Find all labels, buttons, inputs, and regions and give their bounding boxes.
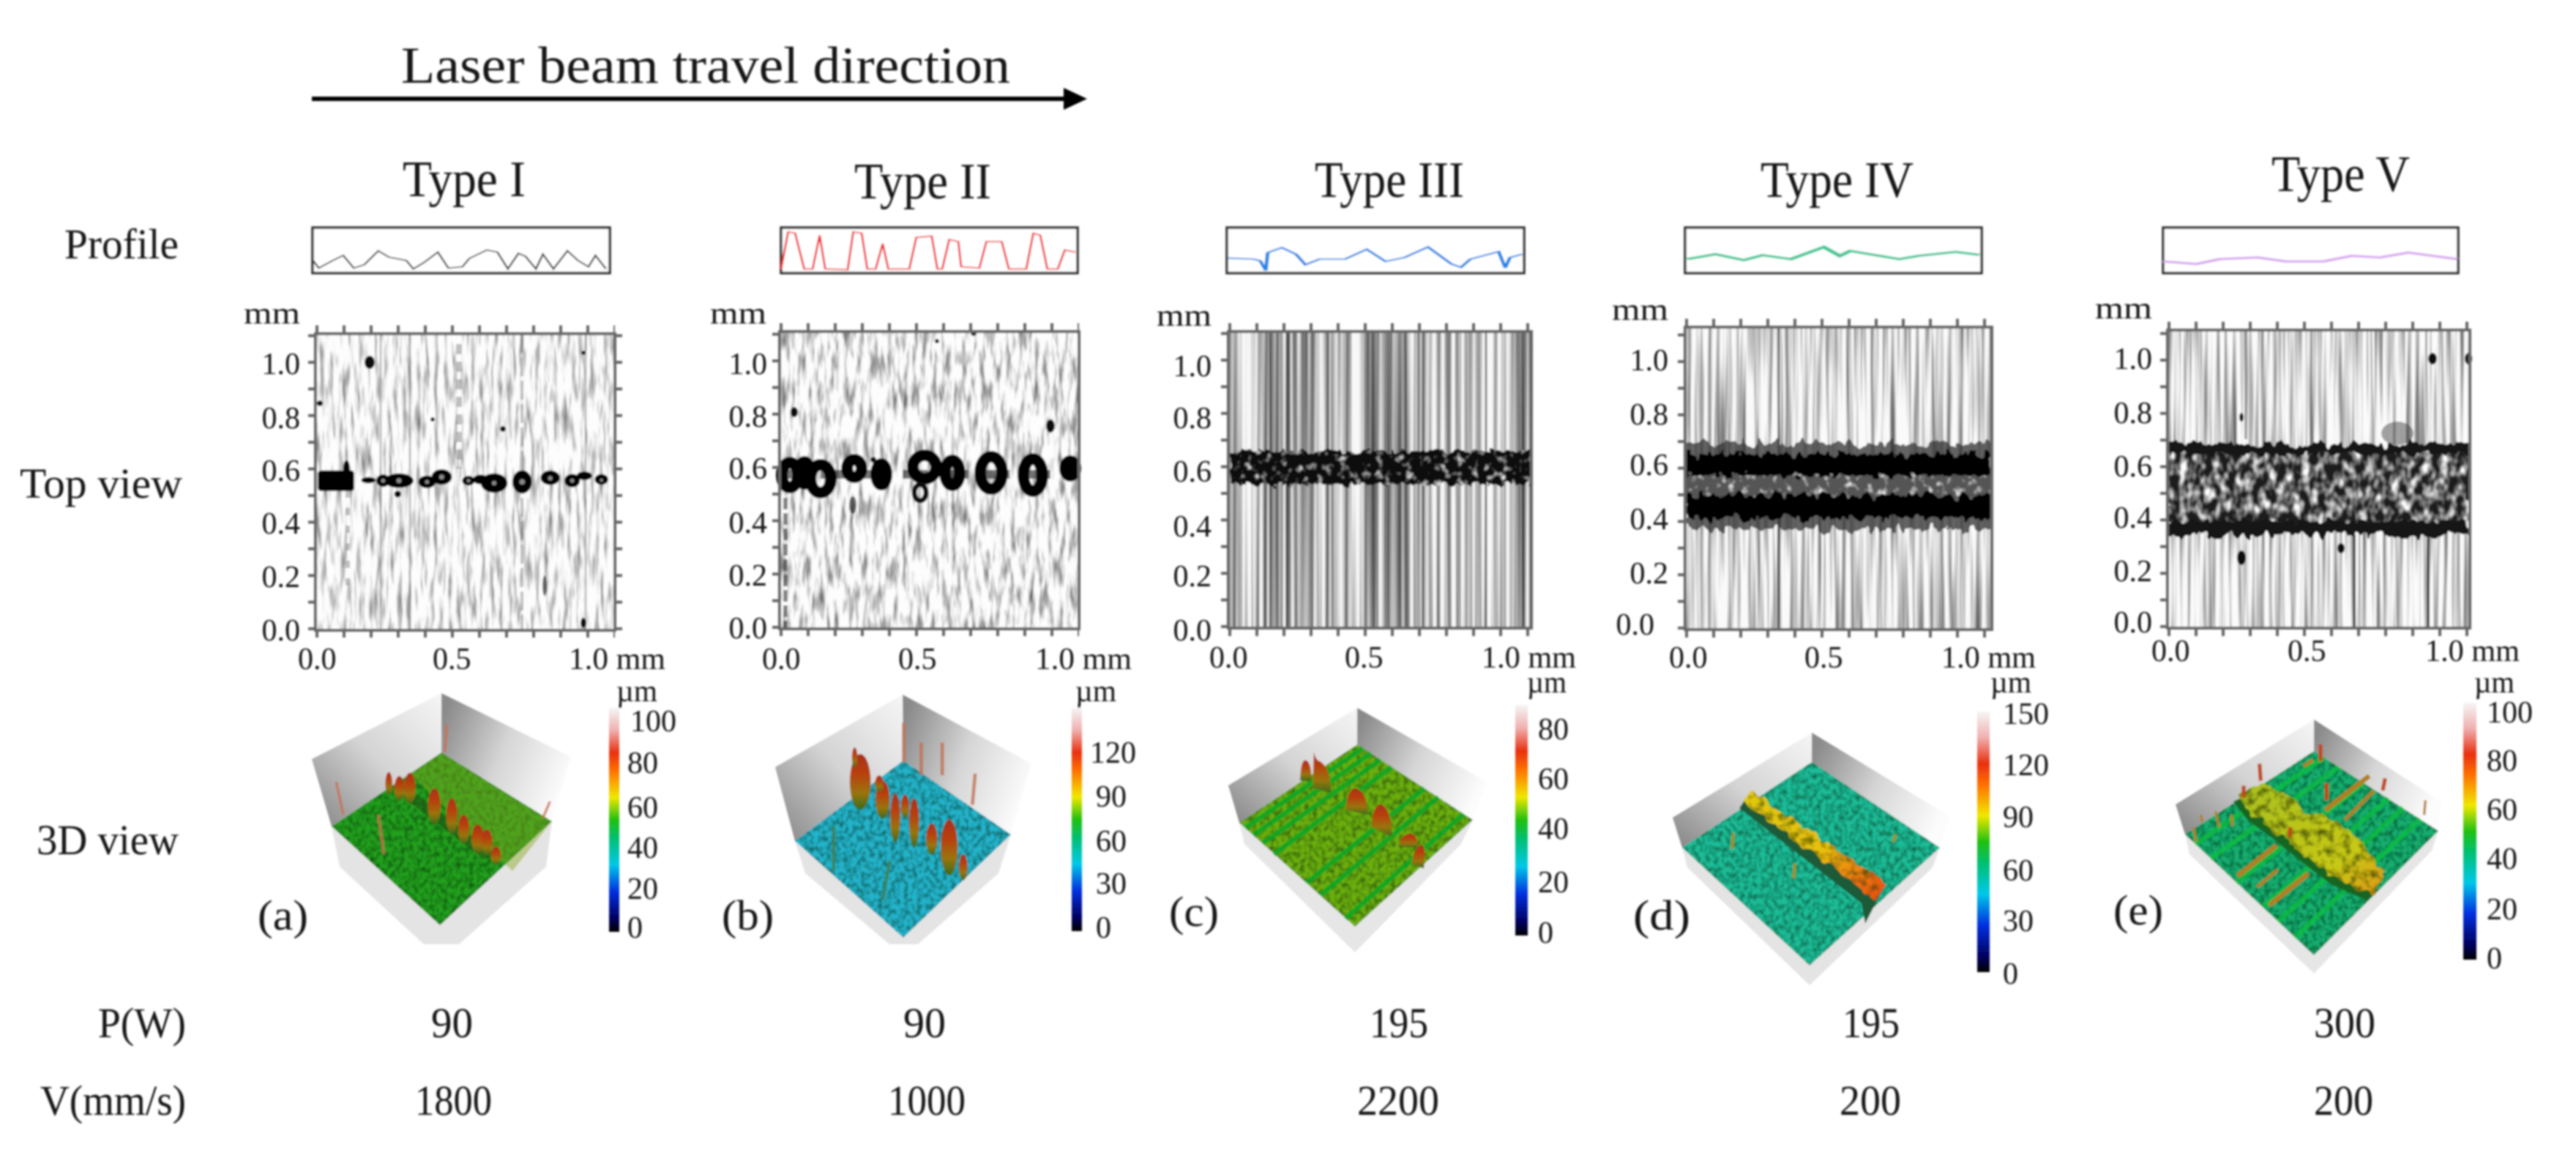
profile chart: Type IV bbox=[1685, 228, 1982, 273]
values: laser power P(W) bbox=[431, 999, 2375, 1047]
profile chart: Type I bbox=[313, 228, 610, 273]
colorbar: Type I: 60 bbox=[627, 791, 658, 825]
colorbar: Type I: 40 bbox=[627, 832, 658, 865]
axis labels: Type III: 0.0 bbox=[1209, 641, 1247, 675]
colorbar: Type III: 20 bbox=[1538, 866, 1569, 900]
colorbar: Type I: 0 bbox=[627, 911, 643, 945]
axis labels: Type I: 0.6 bbox=[262, 455, 300, 488]
colorbar: Type V: µm bbox=[2474, 666, 2515, 700]
axis labels: Type III: 0.6 bbox=[1173, 455, 1212, 489]
panel label (d): (d) bbox=[1633, 892, 1690, 939]
3D view: Type V bbox=[2176, 720, 2441, 974]
axis labels: Type I: 0.2 bbox=[262, 561, 300, 594]
profile chart: Type V bbox=[2163, 228, 2458, 273]
colorbar: Type IV: 90 bbox=[2003, 801, 2034, 834]
axis labels: Type I: 0.0 bbox=[298, 643, 337, 676]
values: laser power P(W): 195 bbox=[1843, 999, 1900, 1047]
colorbar: Type III: µm bbox=[1527, 666, 1567, 700]
axis labels: Type V: 0.4 bbox=[2114, 501, 2152, 535]
colorbar: Type II bbox=[1072, 675, 1136, 945]
axis labels: Type I: 0.8 bbox=[262, 402, 300, 436]
axis labels: Type V: 0.2 bbox=[2114, 555, 2152, 589]
axis labels: Type V: 1.0 bbox=[2114, 343, 2152, 376]
axis labels: Type II: mm bbox=[710, 297, 766, 331]
axis labels: Type IV: 0.0 bbox=[1616, 608, 1654, 642]
axis labels: Type I: 0.4 bbox=[262, 507, 300, 541]
values: scan speed V(mm/s): 200 bbox=[1840, 1077, 1901, 1124]
axis labels: Type IV bbox=[1612, 294, 2036, 675]
3D view: Type III bbox=[1228, 708, 1487, 952]
axis labels: Type III: mm bbox=[1157, 299, 1212, 333]
colorbar: Type II: 120 bbox=[1090, 736, 1136, 770]
axis labels: Type IV: 1.0 mm bbox=[1941, 641, 2036, 675]
profile chart: Type III bbox=[1227, 228, 1524, 273]
panel label (b): (b) bbox=[722, 892, 774, 939]
axis labels: Type V: 0.0 bbox=[2151, 635, 2190, 668]
top view plot: Type IV bbox=[1681, 323, 1992, 634]
axis labels: Type IV: 1.0 bbox=[1629, 344, 1668, 378]
colorbar: Type II: 60 bbox=[1096, 825, 1127, 859]
axis labels: Type V: 0.5 bbox=[2288, 635, 2326, 668]
axis labels: Type II: 0.6 bbox=[729, 452, 767, 486]
colorbar: Type IV: 0 bbox=[2003, 957, 2018, 991]
axis labels: Type I: 1.0 mm bbox=[569, 643, 665, 676]
colorbar: Type I: 20 bbox=[627, 873, 658, 906]
colorbar: Type V: 20 bbox=[2487, 893, 2517, 927]
axis labels: Type III: 1.0 bbox=[1173, 350, 1212, 384]
axis labels: Type V: 1.0 mm bbox=[2425, 635, 2520, 668]
panel label (c): (c) bbox=[1169, 888, 1219, 935]
axis labels: Type II: 0.0 bbox=[729, 612, 767, 646]
colorbar: Type III: 60 bbox=[1538, 763, 1569, 796]
colorbar: Type III bbox=[1515, 666, 1569, 950]
axis labels: Type V: 0.6 bbox=[2114, 450, 2152, 484]
top view plot: Type II bbox=[776, 327, 1079, 632]
colorbar: Type II: 90 bbox=[1096, 780, 1127, 814]
colorbar: Type IV bbox=[1977, 666, 2049, 991]
3D view: Type I bbox=[312, 693, 571, 944]
top view plot: Type V bbox=[2164, 326, 2472, 632]
3D view: Type IV bbox=[1673, 733, 1949, 985]
values: scan speed V(mm/s): 1000 bbox=[888, 1077, 966, 1124]
axis labels: Type I: mm bbox=[244, 297, 300, 331]
axis labels: Type II: 0.8 bbox=[729, 400, 767, 434]
axis labels: Type I: 1.0 bbox=[262, 348, 300, 381]
colorbar: Type II: µm bbox=[1075, 675, 1116, 709]
colorbar: Type V: 40 bbox=[2487, 843, 2517, 876]
heading: Type IV: Type IV bbox=[1761, 152, 1914, 209]
colorbar: Type I: µm bbox=[616, 675, 657, 709]
values: laser power P(W): 300 bbox=[2314, 999, 2375, 1047]
colorbar: Type V: 0 bbox=[2487, 942, 2502, 976]
colorbar: Type I: 80 bbox=[627, 747, 658, 780]
axis labels: Type V: 0.8 bbox=[2114, 397, 2152, 430]
axis labels: Type IV: 0.5 bbox=[1804, 641, 1843, 675]
top view plot: Type I bbox=[312, 329, 619, 634]
axis labels: Type II: 1.0 mm bbox=[1035, 643, 1132, 676]
colorbar: Type V: 100 bbox=[2487, 696, 2533, 730]
axis labels: Type V bbox=[2095, 292, 2520, 668]
values: laser power P(W): 90 bbox=[903, 999, 946, 1047]
colorbar: Type IV: µm bbox=[1990, 666, 2031, 700]
arrow: travel direction bbox=[312, 88, 1087, 110]
axis labels: Type III bbox=[1157, 299, 1576, 675]
values: scan speed V(mm/s): 200 bbox=[2314, 1077, 2373, 1124]
values: laser power P(W): 195 bbox=[1370, 999, 1428, 1047]
values: scan speed V(mm/s) bbox=[415, 1077, 2373, 1124]
axis labels: Type IV: 0.6 bbox=[1629, 449, 1668, 482]
colorbar: Type IV: 60 bbox=[2003, 854, 2034, 888]
heading: Type V: Type V bbox=[2271, 146, 2410, 203]
colorbar: Type III: 40 bbox=[1538, 813, 1569, 846]
heading: Type III: Type III bbox=[1315, 152, 1464, 209]
row label: Top view: Top view bbox=[20, 460, 182, 507]
heading: Type II: Type II bbox=[854, 154, 991, 210]
colorbar: Type II: 30 bbox=[1096, 867, 1127, 901]
colorbar: Type V: 60 bbox=[2487, 793, 2517, 827]
top view plot: Type III bbox=[1225, 327, 1531, 632]
3D view: Type II bbox=[775, 695, 1031, 944]
axis labels: Type III: 0.4 bbox=[1173, 510, 1212, 544]
axis labels: Type IV: 0.0 bbox=[1669, 641, 1707, 675]
colorbar: Type IV: 30 bbox=[2003, 905, 2034, 938]
axis labels: Type I bbox=[244, 297, 665, 676]
heading: Type I: Type I bbox=[403, 152, 526, 208]
axis labels: Type II: 0.4 bbox=[729, 507, 767, 540]
colorbar: Type V bbox=[2463, 666, 2533, 976]
colorbar: Type II: 0 bbox=[1096, 911, 1111, 945]
axis labels: Type III: 0.0 bbox=[1173, 614, 1212, 648]
axis labels: Type III: 0.2 bbox=[1173, 560, 1212, 594]
axis labels: Type IV: 0.4 bbox=[1629, 503, 1668, 537]
values: scan speed V(mm/s): 1800 bbox=[415, 1077, 492, 1124]
axis labels: Type I: 0.5 bbox=[433, 643, 471, 676]
panel label (a): (a) bbox=[258, 892, 308, 939]
axis labels: Type II bbox=[710, 297, 1132, 676]
axis labels: Type II: 0.0 bbox=[762, 643, 801, 676]
axis labels: Type IV: 0.2 bbox=[1629, 557, 1668, 591]
colorbar: Type IV: 150 bbox=[2003, 698, 2049, 731]
colorbar: Type I: 100 bbox=[630, 705, 676, 739]
profile chart: Type II bbox=[781, 228, 1078, 273]
colorbar: Type III: 80 bbox=[1538, 713, 1569, 747]
title: laser beam travel direction: Laser beam travel direction bbox=[401, 37, 1010, 94]
colorbar: Type III: 0 bbox=[1538, 916, 1553, 950]
row label: 3D view: 3D view bbox=[37, 816, 179, 864]
axis labels: Type I: 0.0 bbox=[262, 614, 300, 648]
axis labels: Type IV: mm bbox=[1612, 294, 1668, 327]
values: laser power P(W): 90 bbox=[431, 999, 473, 1047]
axis labels: Type III: 1.0 mm bbox=[1482, 641, 1576, 675]
axis labels: Type II: 0.2 bbox=[729, 559, 767, 593]
colorbar: Type IV: 120 bbox=[2003, 749, 2049, 782]
colorbar: Type V: 80 bbox=[2487, 744, 2517, 778]
axis labels: Type V: mm bbox=[2095, 292, 2152, 326]
axis labels: Type III: 0.5 bbox=[1345, 641, 1384, 675]
row label: V(mm/s): V(mm/s) bbox=[40, 1077, 186, 1124]
axis labels: Type IV: 0.8 bbox=[1629, 398, 1668, 432]
axis labels: Type V: 0.0 bbox=[2114, 606, 2152, 640]
axis labels: Type III: 0.8 bbox=[1173, 402, 1212, 436]
panel label (e): (e) bbox=[2113, 886, 2163, 934]
axis labels: Type II: 1.0 bbox=[729, 348, 767, 381]
row label: P(W): P(W) bbox=[98, 999, 186, 1047]
axis labels: Type II: 0.5 bbox=[898, 643, 937, 676]
values: scan speed V(mm/s): 2200 bbox=[1357, 1077, 1439, 1124]
colorbar: Type I bbox=[609, 675, 676, 945]
row label: Profile: Profile bbox=[64, 220, 179, 268]
